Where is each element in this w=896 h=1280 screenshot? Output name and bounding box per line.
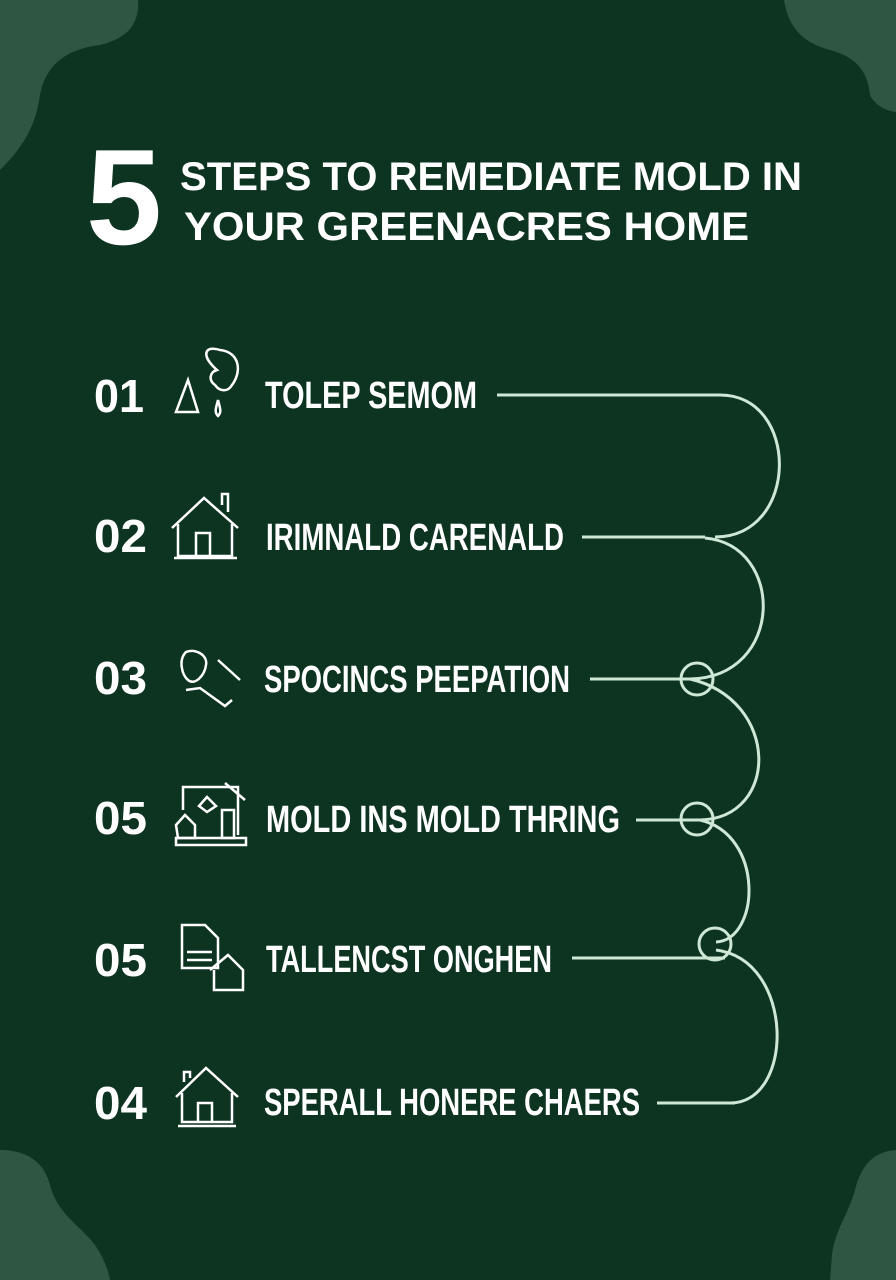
icon: building house [176, 783, 246, 845]
step 02: 02 [94, 510, 147, 562]
step 05: TALLENCST ONGHEN [266, 939, 552, 981]
icon: house [176, 1068, 238, 1126]
step 01: 01 [94, 370, 144, 422]
step 04 [94, 783, 620, 845]
step 05: 05 [94, 934, 147, 986]
icon: mold drop [176, 349, 238, 416]
connector line [497, 395, 779, 1103]
step 06 [94, 1068, 640, 1129]
step 04: MOLD INS MOLD THRING [266, 799, 620, 841]
step 03 [94, 651, 570, 706]
title: 5 [86, 121, 162, 273]
title: STEPS TO REMEDIATE MOLD IN [180, 155, 802, 199]
step 01 [94, 349, 477, 422]
title [86, 121, 802, 273]
icon: document house [182, 925, 243, 990]
icon: hand with mold [182, 651, 240, 706]
step 04: 05 [94, 792, 147, 844]
icon: house [172, 494, 238, 558]
step 02 [94, 494, 564, 562]
step 06: 04 [94, 1077, 147, 1129]
step 05 [94, 925, 552, 990]
step 06: SPERALL HONERE CHAERS [264, 1082, 640, 1124]
step 01: TOLEP SEMOM [265, 375, 477, 417]
step 03: SPOCINCS PEEPATION [264, 659, 570, 701]
title: YOUR GREENACRES HOME [184, 205, 749, 249]
step 03: 03 [94, 652, 147, 704]
step 02: IRIMNALD CARENALD [266, 517, 564, 559]
